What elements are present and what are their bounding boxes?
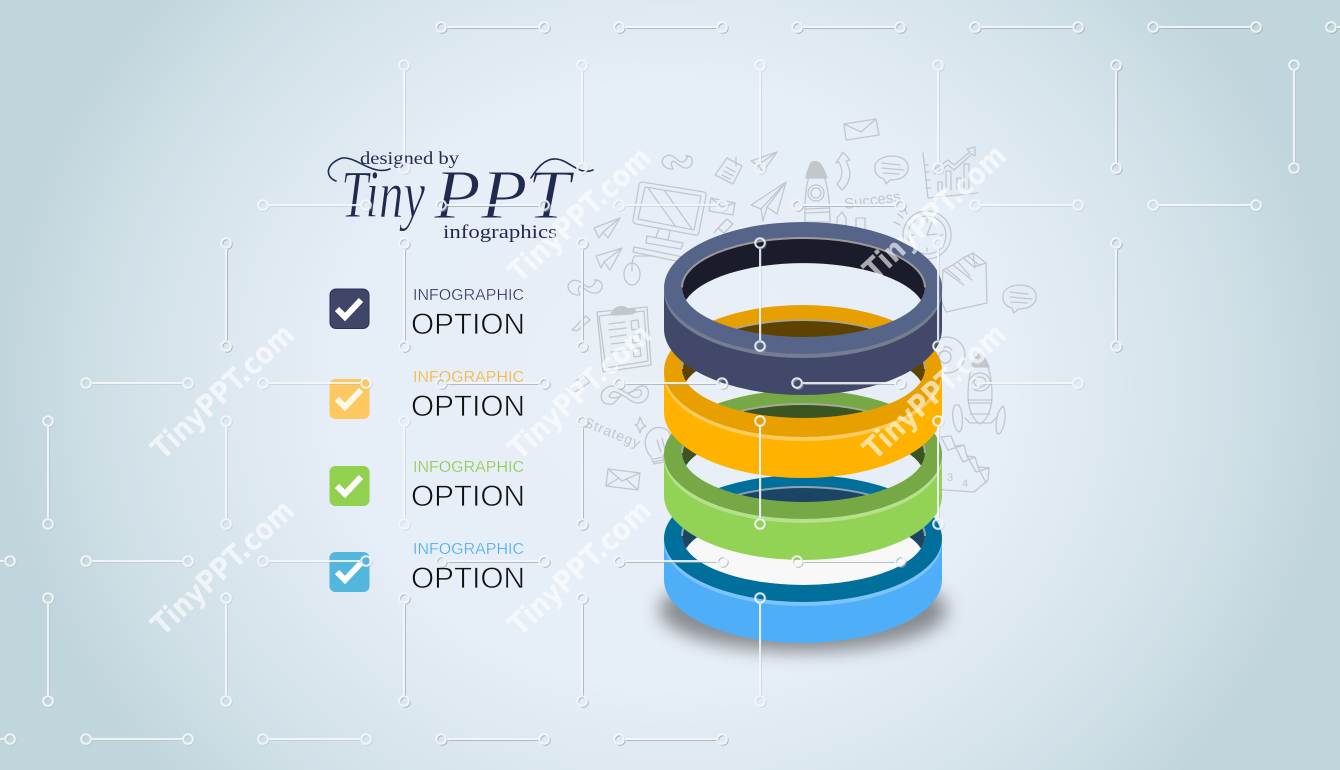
icon: stairs lower: 4 [962, 478, 968, 490]
icon: growth chart [923, 147, 978, 198]
icon: stairs lower: 3 [947, 472, 953, 484]
ring stack [659, 222, 947, 652]
option 4 label: INFOGRAPHIC [413, 541, 524, 558]
logo line: designed by: designed by [360, 148, 459, 168]
logo swashes [328, 158, 593, 181]
watermark 7: TinyPPT.com [502, 493, 659, 643]
icon: small plane [751, 152, 777, 172]
option 4 [330, 541, 525, 595]
option 1 title: OPTION [411, 308, 525, 341]
checkbox 2 [330, 379, 370, 419]
watermarks [145, 138, 1014, 643]
icon: infinity centre [601, 386, 648, 404]
icon: envelope upper [709, 198, 735, 215]
ring 3: green [664, 390, 942, 560]
watermark 5: TinyPPT.com [857, 317, 1014, 467]
watermark 1: TinyPPT.com [145, 317, 302, 467]
ring 2: orange [664, 305, 942, 478]
icon: pen [714, 219, 733, 233]
option 4 title: OPTION [411, 562, 525, 595]
option 1 [330, 287, 525, 341]
icon: rocket top [805, 162, 830, 222]
icon: plane left two [596, 248, 622, 270]
icons: pencil and cup [837, 212, 865, 232]
checkbox 1 [330, 289, 369, 328]
icon: speech bubble top [875, 156, 908, 184]
checkbox 3 [330, 466, 370, 506]
icon: curved arrow [836, 152, 850, 190]
icon: big plane [751, 182, 786, 221]
icon: light bulb [645, 427, 672, 464]
icon: rocket lower [953, 353, 1005, 434]
icon: infinity top [662, 155, 692, 169]
watermark 6: TinyPPT.com [145, 493, 302, 643]
icon: pin [572, 316, 590, 331]
watermark 3: TinyPPT.com [857, 138, 1014, 288]
icon: stairs lower [940, 436, 989, 492]
icon: envelope lower [606, 469, 640, 490]
option 3 [330, 459, 525, 513]
icon: pencil small [568, 375, 590, 392]
icon: plane left one [594, 218, 620, 238]
option 3 label: INFOGRAPHIC [413, 459, 524, 476]
base shadow [659, 568, 947, 652]
text: Success: Success [843, 188, 902, 213]
ring 1: navy [664, 222, 942, 395]
text: Strategy: Strategy [582, 414, 644, 451]
icon: sparkle [635, 417, 646, 433]
checkbox 4 [330, 552, 370, 592]
icon: monitor [633, 182, 706, 262]
icon: stairs upper [941, 253, 987, 312]
logo: designed by TinyPPT infographics [328, 148, 593, 243]
icon: clipboard [597, 307, 651, 372]
option 3 title: OPTION [411, 480, 525, 513]
icon: envelope top [844, 119, 879, 140]
option 2 title: OPTION [411, 390, 525, 423]
icon: note paper [715, 157, 742, 184]
option 1 label: INFOGRAPHIC [413, 287, 524, 304]
watermark 2: TinyPPT.com [502, 140, 659, 290]
icon: mouse [624, 256, 654, 285]
option 2 [330, 369, 525, 423]
logo wordmark: Tiny: Tiny [341, 156, 426, 232]
icon: speech bubble right [1003, 285, 1036, 313]
doodle icons cluster [568, 119, 1036, 492]
icon: infinity left [568, 280, 602, 295]
options list [330, 287, 525, 595]
icon: target circle [929, 337, 965, 373]
ring 4: blue [664, 475, 942, 643]
option 2 label: INFOGRAPHIC [413, 369, 524, 386]
logo line: infographics: infographics [443, 222, 557, 243]
watermark 4: TinyPPT.com [502, 317, 659, 467]
icon: clock [894, 208, 951, 259]
logo wordmark: PPT: PPT [433, 157, 576, 234]
